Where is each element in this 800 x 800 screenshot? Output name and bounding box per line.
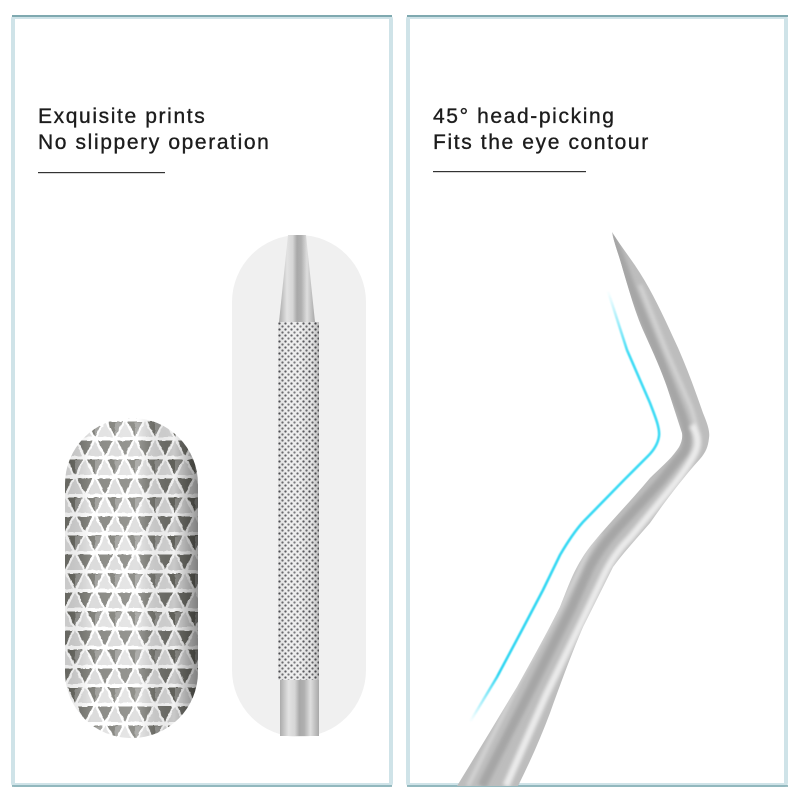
icon: bent needle tip xyxy=(457,232,710,786)
heading: exquisite prints: No slippery operation xyxy=(38,131,270,154)
contour line: cyan xyxy=(470,291,659,722)
background pill for handle xyxy=(232,235,366,737)
panel: 45 degree head xyxy=(407,16,788,790)
heading: exquisite prints: Exquisite prints xyxy=(38,105,206,128)
icon: needle handle xyxy=(278,235,319,736)
panel frame left xyxy=(12,16,392,786)
heading underline right xyxy=(433,171,586,172)
heading: 45 degree head-picking: 45° head-picking xyxy=(433,105,616,128)
heading: 45 degree head-picking: Fits the eye contour xyxy=(433,131,650,154)
panel: exquisite prints xyxy=(12,16,392,786)
heading underline left xyxy=(38,172,165,173)
swatch: knurl texture close-up xyxy=(65,418,198,738)
panel frame right xyxy=(407,16,788,786)
